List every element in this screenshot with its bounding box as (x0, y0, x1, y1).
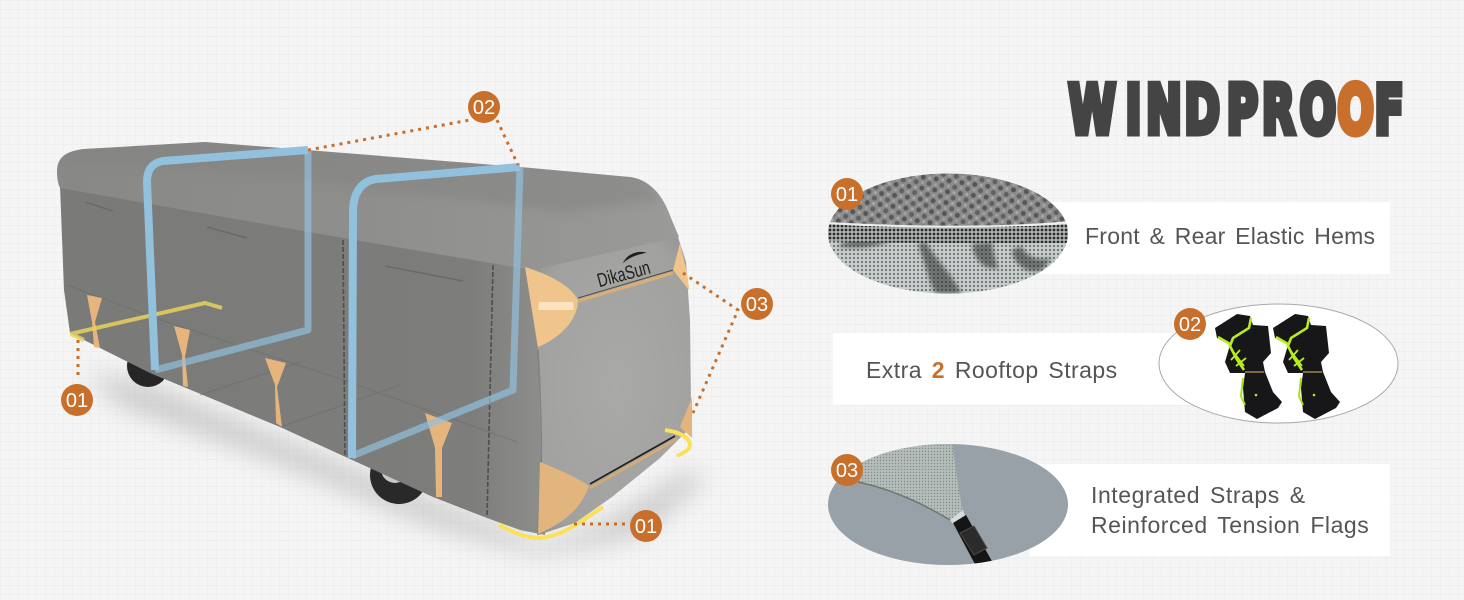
yellow elastic hem front (499, 507, 603, 538)
badge 01: 01 (836, 184, 858, 206)
tan corner flag upper left (525, 267, 578, 347)
badge 03 right: 03 (746, 294, 768, 316)
logo: DikaSun (595, 257, 653, 292)
dotted leader 03 (683, 273, 738, 413)
badge 03 right (741, 288, 773, 320)
feature row 1 (828, 173, 1390, 294)
badge 03: 03 (836, 460, 858, 482)
flag highlight (538, 302, 574, 310)
side window recesses (85, 202, 463, 281)
yellow elastic hem right (665, 430, 690, 456)
badge 01 bottom (630, 510, 662, 542)
RV illustration (57, 91, 773, 555)
rooftop strap 1 (147, 150, 308, 370)
badge 02 top (468, 91, 500, 123)
roof (57, 142, 679, 269)
badge 01 (831, 178, 863, 210)
badge 03 (831, 454, 863, 486)
badge 02: 02 (1179, 314, 1201, 336)
feature row 2 (833, 304, 1398, 423)
dotted leader 02 (308, 120, 518, 165)
dotted leader 01 left (76, 340, 80, 378)
tan corner flag lower left (538, 462, 589, 534)
photo: rooftop straps (1159, 304, 1398, 423)
yellow elastic hem rear (70, 303, 222, 340)
rear wheel (127, 345, 169, 387)
front edge shadow (538, 350, 541, 535)
badge 01 left: 01 (66, 390, 88, 412)
roof top shading (68, 142, 652, 208)
infographic canvas (57, 80, 1402, 573)
white label panel 1 (1030, 202, 1390, 274)
feature text 2: Extra 2 Rooftop Straps (866, 357, 1118, 383)
title: WINDPROOF (1069, 72, 1404, 150)
tan corner flag lower right (680, 397, 692, 438)
lower front strap (590, 436, 677, 488)
feature row 3 (828, 440, 1390, 568)
ground shadow (85, 372, 705, 555)
photo: tension flag (828, 440, 1068, 568)
badge 02 (1174, 308, 1206, 340)
white label panel 3 (1030, 464, 1390, 556)
badge 01 bottom: 01 (635, 516, 657, 538)
photo: elastic hem (828, 173, 1068, 294)
front face (525, 237, 691, 535)
badge 01 left (61, 384, 93, 416)
badge 02 top: 02 (473, 97, 495, 119)
upper front strap (578, 270, 673, 301)
feature text 3: Reinforced Tension Flags (1091, 512, 1369, 538)
rooftop strap 2 (352, 167, 520, 458)
tan corner flag upper right (673, 243, 689, 290)
feature text 3: Integrated Straps & (1091, 482, 1306, 508)
tan side tension flags (87, 295, 452, 497)
side body (60, 185, 545, 535)
front wheel (370, 446, 428, 504)
side seams (343, 240, 493, 517)
feature text 1: Front & Rear Elastic Hems (1085, 223, 1375, 249)
dotted leader 01 bottom (574, 522, 628, 526)
white label panel 2 (833, 333, 1193, 405)
skirt panels (67, 285, 517, 442)
